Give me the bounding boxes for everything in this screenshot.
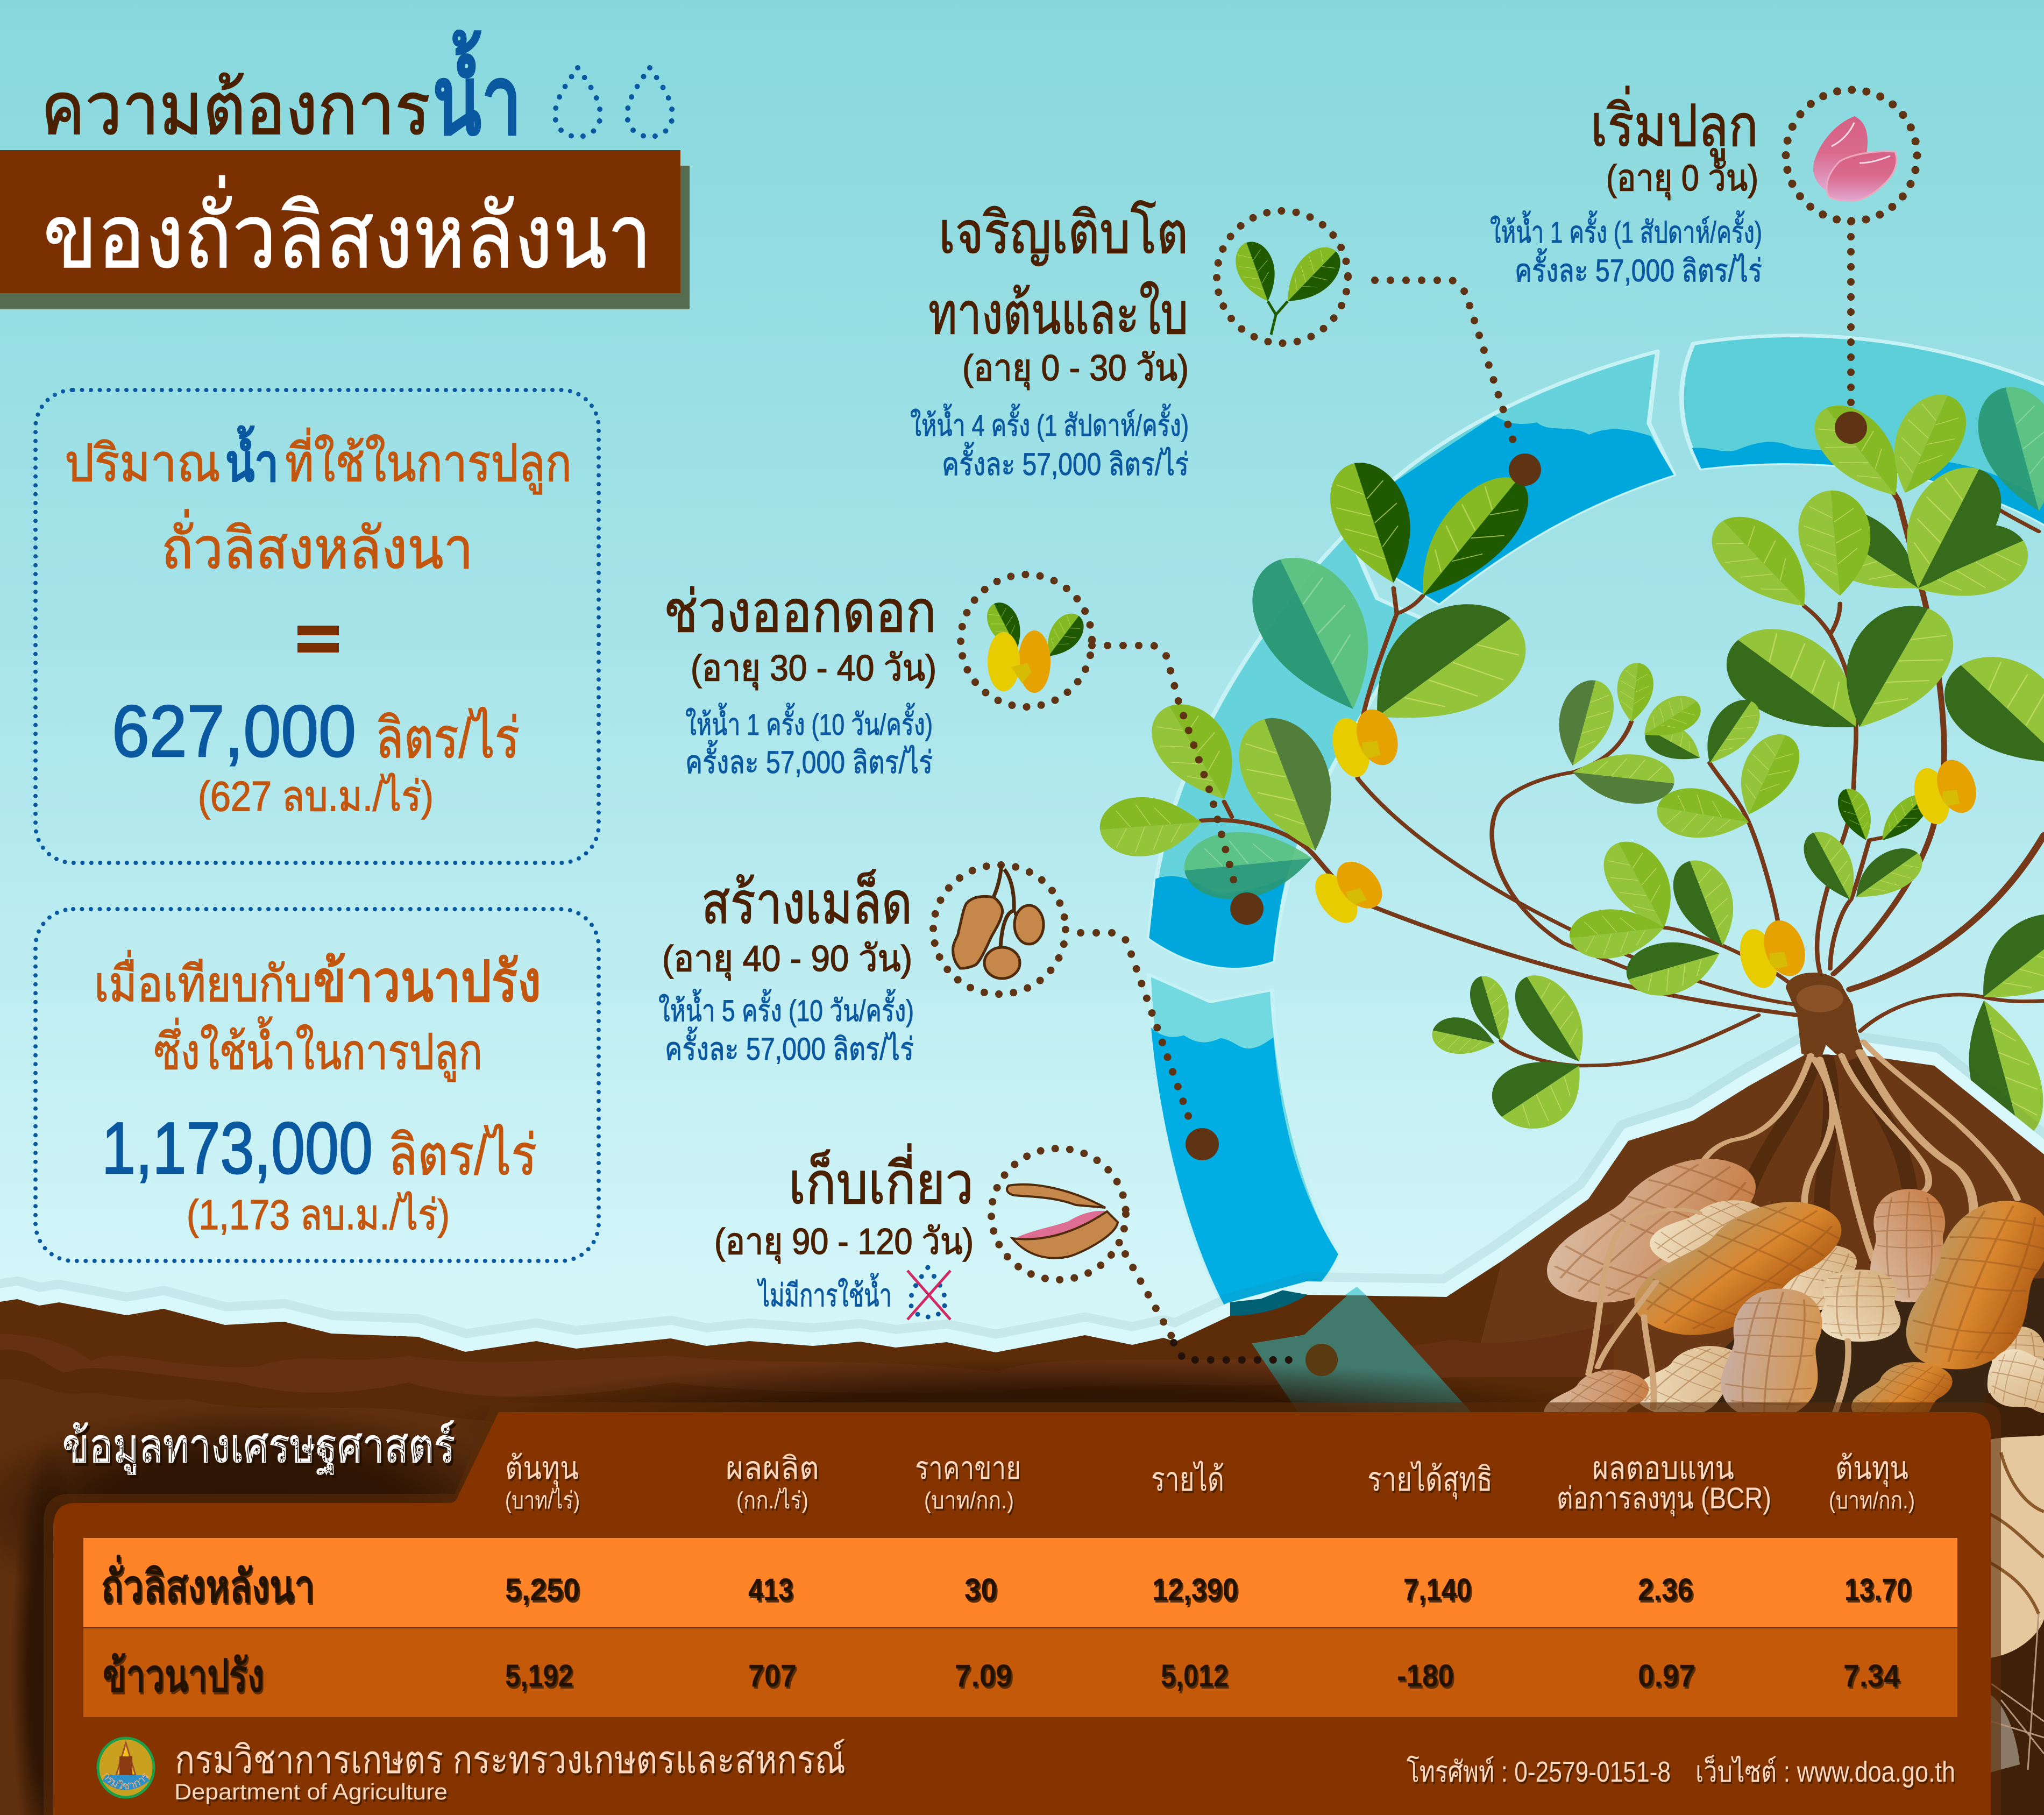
rice label: ข้าวนาปรัง <box>313 950 541 1013</box>
phone: โทรศัพท์ : 0-2579-0151-8 <box>1407 1755 1671 1788</box>
strip background <box>1985 1393 2044 1815</box>
title word: water: น้ำ <box>432 30 522 155</box>
stage title: เก็บเกี่ยว <box>789 1144 974 1216</box>
logo: department emblem: กรมวิชาการเกษตร <box>102 1773 148 1789</box>
row two: rice values: -180 <box>1397 1658 1454 1693</box>
icon: crossed water drop <box>907 1267 950 1320</box>
soil shade above panel <box>430 1358 1667 1504</box>
cubic metre note: (1,173 ลบ.ม./ไร่) <box>187 1191 450 1238</box>
table headers: (กก./ไร่) <box>736 1487 808 1514</box>
row two: rice values: 5,012 <box>1161 1658 1229 1693</box>
right photo strip <box>1982 1344 2044 1815</box>
section: flowering <box>1149 531 1423 968</box>
row two: rice values: 7.09 <box>955 1658 1012 1693</box>
dotted circle <box>1217 211 1348 343</box>
heading word water: น้ำ <box>225 425 279 492</box>
row one: peanut values: 413 <box>748 1572 793 1607</box>
dark gap behind peanuts <box>1631 1278 2044 1429</box>
target dots <box>1186 412 1867 1376</box>
table headers: (บาท/กก.) <box>924 1487 1014 1514</box>
equals sign <box>297 626 339 653</box>
dotted frame <box>36 909 599 1261</box>
organisation name: กรมวิชาการเกษตร กระทรวงเกษตรและสหกรณ์ <box>175 1739 846 1782</box>
icon: seedling <box>1229 236 1350 335</box>
title: water requirement <box>41 30 672 155</box>
row divider <box>83 1627 1957 1628</box>
stage title line two: ทางต้นและใบ <box>928 281 1188 346</box>
row one: peanut values: 7,140 <box>1403 1572 1472 1607</box>
dotted frame <box>36 390 599 863</box>
stage: seed forming <box>658 864 1066 1067</box>
rootlets <box>1991 1614 2044 1770</box>
stage: vegetative growth <box>910 200 1350 482</box>
watering frequency: ให้น้ำ 5 ครั้ง (10 วัน/ครั้ง) <box>658 989 914 1027</box>
table headers: ต้นทุน <box>1835 1451 1908 1487</box>
section: planting <box>1681 336 2044 536</box>
connector: harvest <box>1125 1254 1172 1336</box>
soil and hill <box>0 1047 2044 1815</box>
table headers: (บาท/ไร่) <box>505 1487 580 1514</box>
economics heading: ข้อมูลทางเศรษฐศาสตร์ <box>62 1419 455 1475</box>
stage title: ช่วงออกดอก <box>664 579 936 644</box>
organisation english name: Department of Agriculture <box>174 1779 448 1804</box>
banner text: ของถั่วลิสงหลังนา <box>43 175 652 287</box>
table headers: (บาท/กก.) <box>1829 1487 1915 1514</box>
seed band over soil <box>1230 1290 1307 1316</box>
plant stems <box>1201 490 2044 1066</box>
soil soft halo shadow <box>0 1047 2044 1807</box>
section: seed forming <box>1148 975 1338 1316</box>
no watering note: ไม่มีการใช้น้ำ <box>757 1273 892 1313</box>
water: vegetative growth <box>1386 416 1674 604</box>
trunk highlight <box>1797 985 1843 1012</box>
stage title: สร้างเมล็ด <box>701 869 912 935</box>
value 1173000: 1,173,000 <box>102 1107 373 1189</box>
table headers: ผลผลิต <box>726 1451 819 1486</box>
table headers: ต่อการลงทุน (BCR) <box>1557 1481 1771 1516</box>
leaf cluster: right edge <box>1950 899 2044 1144</box>
panel: rice comparison <box>36 909 599 1261</box>
unit litres per rai: ลิตร/ไร่ <box>375 707 520 770</box>
leaf cluster: mid branch <box>1547 662 1936 910</box>
banner body <box>0 150 680 293</box>
leaf cluster: upper left <box>1096 456 1553 904</box>
watering amount: ครั้งละ 57,000 ลิตร/ไร่ <box>665 1027 914 1067</box>
watering frequency: ให้น้ำ 4 ครั้ง (1 สัปดาห์/ครั้ง) <box>910 404 1189 442</box>
row one: peanut values <box>101 1555 1912 1612</box>
band: upper sections <box>1149 336 2044 968</box>
water use text: ซึ่งใช้น้ำในการปลูก <box>154 1016 482 1082</box>
soil shade left of panel <box>11 1442 86 1815</box>
value 627000: 627,000 <box>112 690 356 772</box>
flowers <box>1303 706 1982 990</box>
soil layer light <box>0 1323 1614 1815</box>
logo: department emblem <box>97 1736 155 1799</box>
table headers <box>505 1451 1915 1516</box>
row two: rice values: 707 <box>748 1658 797 1693</box>
icon: opened pod <box>1007 1185 1118 1258</box>
table row: rice <box>83 1628 1957 1717</box>
water: planting <box>1692 442 2044 536</box>
dark root shadows <box>1749 1059 1910 1223</box>
cubic metre note: (627 ลบ.ม./ไร่) <box>198 772 434 820</box>
connector: planting <box>1847 222 1855 414</box>
heading part one: ปริมาณ <box>65 435 221 492</box>
trunk and roots <box>1749 973 1910 1223</box>
connector: harvest on soil <box>1174 1343 1298 1360</box>
soil surface <box>0 1055 2044 1815</box>
water band arc <box>1148 336 2044 1316</box>
banner shadow <box>0 166 690 309</box>
watering frequency: ให้น้ำ 1 ครั้ง (1 สัปดาห์/ครั้ง) <box>1490 211 1762 249</box>
dotted circle <box>933 865 1066 994</box>
row one: peanut values: 5,250 <box>505 1572 580 1607</box>
row one: peanut values: 12,390 <box>1152 1572 1238 1607</box>
tap roots <box>1699 1041 2018 1292</box>
title line one: ความต้องการ <box>41 68 430 150</box>
title banner <box>0 150 690 309</box>
icon: dotted water drop <box>627 68 672 137</box>
leaf cluster: lower branch <box>1427 834 1749 1142</box>
soil shade behind heading tab <box>0 1404 554 1619</box>
peanut pods <box>1520 1144 2044 1442</box>
stage title: เริ่มปลูก <box>1591 86 1758 161</box>
peanuts and roots <box>1520 1041 2044 1442</box>
website: เว็บไซต์ : www.doa.go.th <box>1695 1755 1955 1788</box>
water: seed forming <box>1151 1027 1338 1316</box>
row two: rice values: ข้าวนาปรัง <box>103 1650 264 1701</box>
stage title line one: เจริญเติบโต <box>939 200 1188 266</box>
stage: flowering <box>664 575 1092 780</box>
row two: rice values: 0.97 <box>1638 1658 1695 1693</box>
hill colour <box>1452 1055 2044 1452</box>
soil layer dark <box>0 1350 1614 1815</box>
pod pegs <box>1588 1209 1848 1412</box>
leaf cluster: top right <box>1694 381 2044 790</box>
cream pods <box>1990 1435 2044 1658</box>
table headers: รายได้ <box>1151 1460 1224 1498</box>
pod creases <box>1990 1452 2044 1614</box>
water: flowering <box>1149 876 1286 968</box>
watering amount: ครั้งละ 57,000 ลิตร/ไร่ <box>685 740 933 780</box>
unit litres per rai: ลิตร/ไร่ <box>388 1124 537 1187</box>
icon: developing pods <box>953 864 1044 979</box>
stage age: (อายุ 0 - 30 วัน) <box>962 348 1189 390</box>
row two: rice values <box>103 1650 1900 1701</box>
stage: planting <box>1490 86 1917 288</box>
row one: peanut values: ถั่วลิสงหลังนา <box>101 1555 315 1612</box>
row one: peanut values: 30 <box>964 1572 997 1607</box>
trunk body <box>1786 973 1865 1062</box>
heading part two: ที่ใช้ในการปลูก <box>285 428 572 494</box>
band: lower section <box>1148 975 1338 1316</box>
stage markers and dotted connectors <box>1081 222 1851 1360</box>
upper pod <box>1982 1344 2044 1421</box>
table headers: ราคาขาย <box>915 1451 1021 1486</box>
harvest band tip <box>1344 1287 1366 1295</box>
peanut plant leaves and flowers <box>1096 381 2044 1144</box>
harvest teal band <box>1252 1287 1471 1412</box>
connector: seed <box>1081 933 1190 1121</box>
stage age: (อายุ 0 วัน) <box>1606 158 1758 200</box>
icon: flower sprig <box>981 597 1091 693</box>
comparison text: เมื่อเทียบกับ <box>94 950 312 1012</box>
table row: peanut <box>83 1538 1957 1628</box>
panel: water volume for peanuts <box>36 390 599 863</box>
soil pale outline <box>0 1047 2044 1807</box>
watering amount: ครั้งละ 57,000 ลิตร/ไร่ <box>942 442 1189 482</box>
grey pod bottom <box>1990 1695 2020 1773</box>
stage: harvest <box>714 1144 1126 1320</box>
row one: peanut values: 2.36 <box>1638 1572 1693 1607</box>
section: vegetative growth <box>1387 351 1674 604</box>
table headers: รายได้สุทธิ <box>1367 1460 1493 1499</box>
heading line two: ถั่วลิสงหลังนา <box>161 509 473 580</box>
watering frequency: ให้น้ำ 1 ครั้ง (10 วัน/ครั้ง) <box>685 703 933 741</box>
stage age: (อายุ 30 - 40 วัน) <box>691 648 936 690</box>
dotted circle <box>961 575 1092 707</box>
row two: rice values: 5,192 <box>505 1658 573 1693</box>
watering amount: ครั้งละ 57,000 ลิตร/ไร่ <box>1515 249 1762 288</box>
connector: growth <box>1375 280 1514 444</box>
icon: pink seeds <box>1813 116 1897 201</box>
panel frame <box>44 1402 2001 1815</box>
dotted circle <box>1786 90 1917 221</box>
row one: peanut values: 13.70 <box>1844 1572 1912 1607</box>
dotted circle <box>991 1148 1126 1280</box>
panel body <box>53 1412 1991 1815</box>
soil layer lower <box>0 1379 753 1815</box>
table headers: ผลตอบแทน <box>1592 1451 1734 1486</box>
icon: dotted water drop <box>555 68 600 137</box>
row two: rice values: 7.34 <box>1843 1658 1900 1693</box>
connector: flowering <box>1092 646 1234 881</box>
stage age: (อายุ 40 - 90 วัน) <box>662 938 912 981</box>
stage age: (อายุ 90 - 120 วัน) <box>714 1221 974 1264</box>
table headers: ต้นทุน <box>505 1451 579 1487</box>
